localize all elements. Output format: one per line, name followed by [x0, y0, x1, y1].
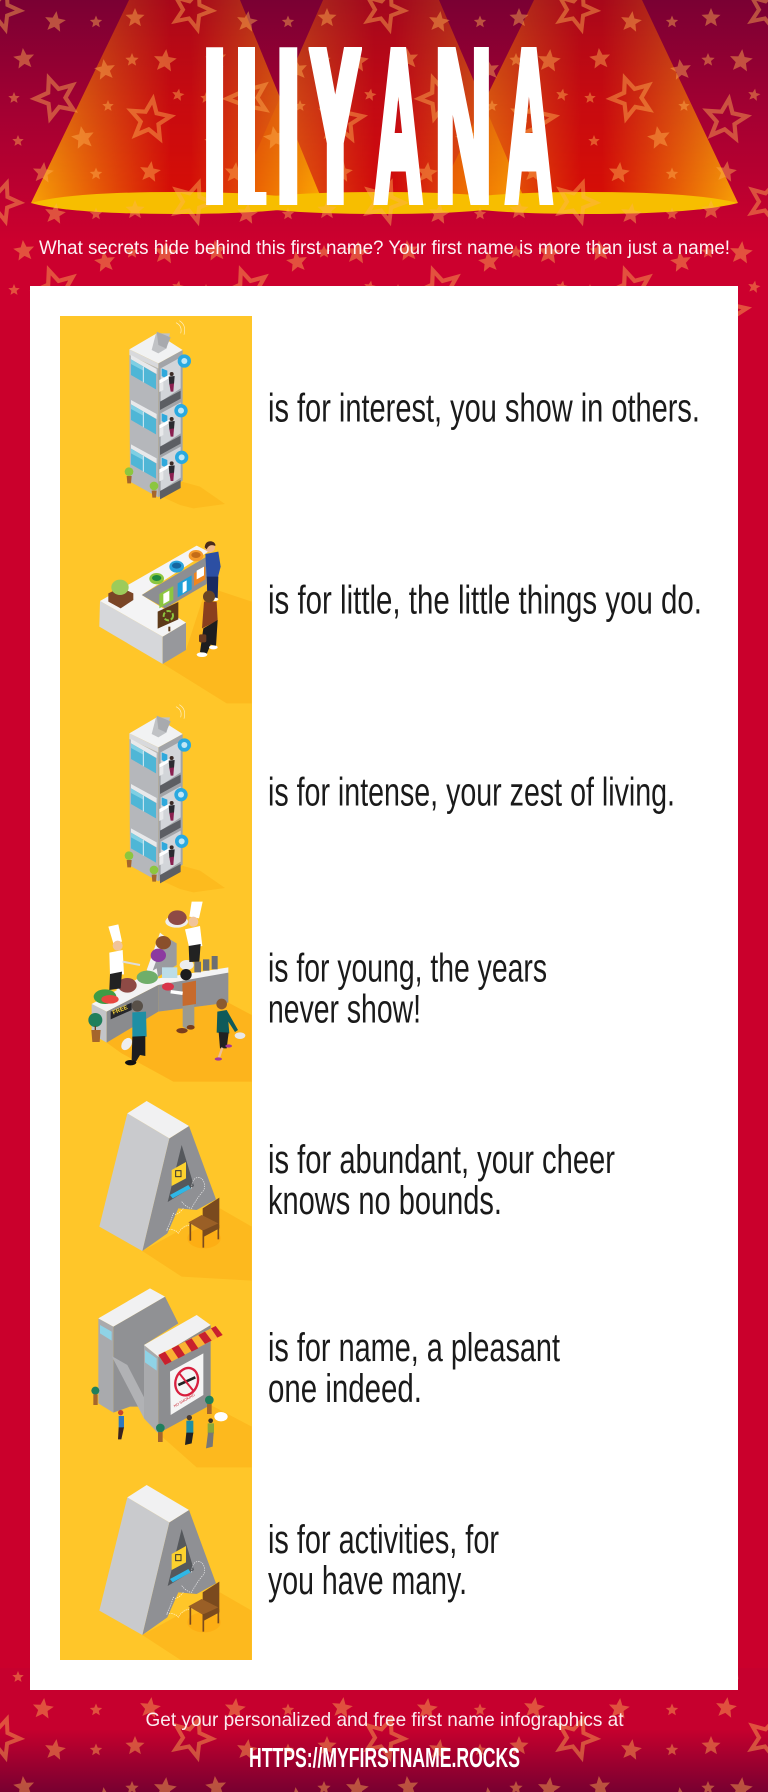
teal shirt customer [119, 1000, 147, 1065]
icon: office building I second [125, 705, 225, 892]
text: A row second [268, 1518, 499, 1603]
text: A row: knows no bounds. [268, 1179, 502, 1223]
yellow illustration column [60, 316, 252, 1665]
title [206, 47, 554, 205]
text: N row: one indeed. [268, 1367, 422, 1411]
white content panel [30, 286, 738, 1690]
text: Y row: is for young, the years [268, 946, 547, 990]
tagline: What secrets hide behind this first name? Your first name is more than just a name! [39, 238, 730, 259]
icon: letter A with chair second [99, 1485, 252, 1665]
text: N row [268, 1326, 560, 1411]
icon: letter A with chair [99, 1101, 252, 1281]
orange shirt customer [162, 969, 196, 1033]
footer url: HTTPS://MYFIRSTNAME.ROCKS [249, 1742, 520, 1773]
icon: recycling station L [99, 541, 252, 703]
icon: letter N storefront: NO SMOKING [173, 1393, 196, 1408]
left chef [108, 924, 140, 990]
icon: buffet Y: FREE [112, 1005, 129, 1017]
text: N row: is for name, a pleasant [268, 1326, 560, 1370]
footer text: Get your personalized and free first name infographics at [146, 1709, 624, 1731]
text: A row [268, 1138, 615, 1223]
icon: office building I [125, 321, 225, 508]
text: Y row [268, 946, 547, 1032]
icon: letter N storefront [91, 1288, 252, 1467]
right chef [165, 902, 203, 962]
spotlights [31, 0, 738, 214]
icon: buffet Y [88, 902, 252, 1082]
text: A row: is for abundant, your cheer [268, 1138, 615, 1182]
text: A row second: is for activities, for [268, 1518, 499, 1562]
woman customer [215, 999, 245, 1061]
text: A row second: you have many. [268, 1559, 467, 1603]
text: Y row: never show! [268, 988, 421, 1032]
